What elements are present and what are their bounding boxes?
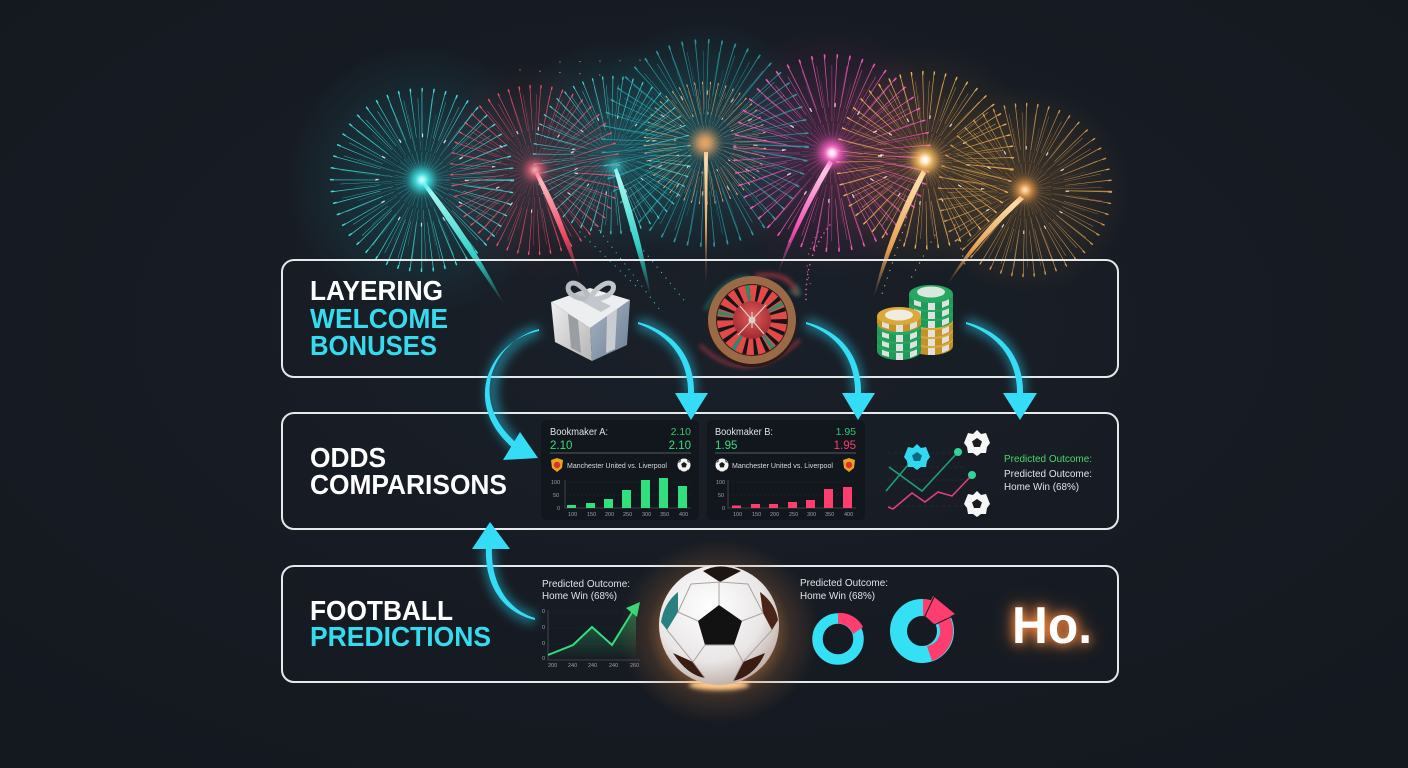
arrow: gift to bookmaker A (485, 329, 539, 460)
text: predicted outcome, left of ball: Predicted Outcome: (542, 578, 630, 590)
team row: Manchester United vs. Liverpool (567, 461, 667, 470)
line chart: rising green trend: 0 (542, 609, 545, 615)
bar chart: bookmaker A: 400 (679, 512, 688, 518)
line chart: odds trend with balls (886, 430, 990, 517)
firework: teal outer with orange core (600, 38, 810, 248)
card: bookmaker B (707, 420, 865, 520)
line chart: rising green trend: 0 (542, 625, 545, 631)
panel: odds comparisons (282, 413, 1118, 529)
firework core lights (410, 132, 1035, 200)
bar chart: bookmaker B (716, 480, 856, 518)
firework: teal centre (524, 67, 700, 243)
icon: casino chip stacks (877, 285, 953, 360)
panel: football predictions (282, 566, 1118, 682)
bar chart: bookmaker A: 50 (553, 493, 559, 499)
icon: silver gift box (551, 283, 630, 361)
heading: layering welcome bonuses: WELCOME (310, 303, 448, 334)
bar chart: bookmaker B: 350 (825, 512, 834, 518)
bar chart: bookmaker A: 0 (557, 506, 560, 512)
card: bookmaker B: 1.95 (836, 426, 856, 438)
bar chart: bookmaker B: 400 (844, 512, 853, 518)
card: bookmaker A (541, 420, 699, 520)
heading: football predictions (310, 595, 491, 652)
firework: pink (730, 51, 934, 255)
team row (716, 458, 855, 472)
bar chart: bookmaker A: 250 (623, 512, 632, 518)
fireworks (287, 20, 1130, 315)
falling sparks (520, 60, 965, 310)
donut chart: small (818, 613, 863, 660)
firework: gold (829, 64, 1021, 256)
bar chart: bookmaker A: 150 (587, 512, 596, 518)
arrow: football predictions up to odds (472, 522, 535, 620)
firework trails (423, 152, 1024, 306)
text: predicted outcome, left of ball (542, 578, 630, 602)
bar chart: bookmaker B: 250 (789, 512, 798, 518)
bar chart: bookmaker B: 150 (752, 512, 761, 518)
glowing text: Ho.: Ho. (1012, 597, 1092, 655)
bar chart: bookmaker B: 100 (716, 480, 725, 486)
card: bookmaker A: Bookmaker A: (550, 426, 608, 438)
heading: odds comparisons: COMPARISONS (310, 469, 507, 500)
text: predicted outcome, odds panel: Home Win (68%) (1004, 481, 1079, 493)
bar chart: bookmaker A (551, 478, 691, 518)
icon: glowing football (619, 540, 819, 724)
donut chart: large (898, 596, 955, 661)
bar chart: bookmaker B: 50 (718, 493, 724, 499)
text: predicted outcome, odds panel (1004, 453, 1092, 493)
bar chart: bookmaker B: 300 (807, 512, 816, 518)
line chart: rising green trend: 0 (542, 641, 545, 647)
firework: amber right (938, 103, 1112, 277)
team row (551, 458, 690, 472)
line chart: rising green trend: 240 (588, 663, 597, 669)
line chart: rising green trend: 0 (542, 656, 545, 662)
text: predicted outcome, right of ball: Home Win (68%) (800, 590, 875, 602)
card: bookmaker B: 1.95 (834, 440, 856, 452)
card: bookmaker A: 2.10 (669, 440, 691, 452)
heading: layering welcome bonuses (310, 275, 448, 361)
text: predicted outcome, right of ball (800, 577, 888, 602)
heading: layering welcome bonuses: LAYERING (310, 275, 443, 306)
glowing text: Ho.: Ho. (1012, 597, 1092, 655)
line chart: rising green trend: 200 (548, 663, 557, 669)
heading: football predictions: FOOTBALL (310, 595, 453, 626)
firework: teal left (332, 90, 512, 270)
card: bookmaker A: 2.10 (671, 426, 691, 438)
card: bookmaker B: Bookmaker B: (715, 426, 773, 438)
bar chart: bookmaker B: 0 (722, 506, 725, 512)
text: predicted outcome, right of ball: Predicted Outcome: (800, 577, 888, 589)
bar chart: bookmaker A: 100 (568, 512, 577, 518)
card: bookmaker A: 2.10 (550, 440, 572, 452)
line chart: rising green trend: 240 (609, 663, 618, 669)
heading: odds comparisons (310, 442, 507, 500)
arrow: chips to prediction chart (966, 322, 1037, 420)
heading: football predictions: PREDICTIONS (310, 621, 491, 652)
bar chart: bookmaker A: 300 (642, 512, 651, 518)
bar chart: bookmaker A: 200 (605, 512, 614, 518)
line chart: rising green trend (542, 602, 640, 669)
arrow: roulette to bookmaker B (806, 322, 875, 420)
arrow: gift to bookmaker A column (638, 322, 708, 420)
glowing text: Ho.: Ho. (1012, 597, 1092, 655)
text: predicted outcome, odds panel: Predicted Outcome: (1004, 468, 1092, 480)
team row: Manchester United vs. Liverpool (732, 461, 833, 470)
firework glow halos (287, 20, 1130, 315)
firework: red (446, 81, 624, 259)
bar chart: bookmaker B: 100 (733, 512, 742, 518)
bar chart: bookmaker B: 200 (770, 512, 779, 518)
text: predicted outcome, odds panel: Predicted Outcome: (1004, 453, 1092, 465)
heading: layering welcome bonuses: BONUSES (310, 330, 437, 361)
card: bookmaker B: 1.95 (715, 440, 737, 452)
text: predicted outcome, left of ball: Home Win (68%) (542, 590, 617, 602)
bar chart: bookmaker A: 100 (551, 480, 560, 486)
icon: roulette wheel (700, 275, 800, 367)
line chart: rising green trend: 260 (630, 663, 639, 669)
panel: layering welcome bonuses (282, 260, 1118, 377)
bar chart: bookmaker A: 350 (660, 512, 669, 518)
heading: odds comparisons: ODDS (310, 442, 386, 473)
line chart: rising green trend: 240 (568, 663, 577, 669)
